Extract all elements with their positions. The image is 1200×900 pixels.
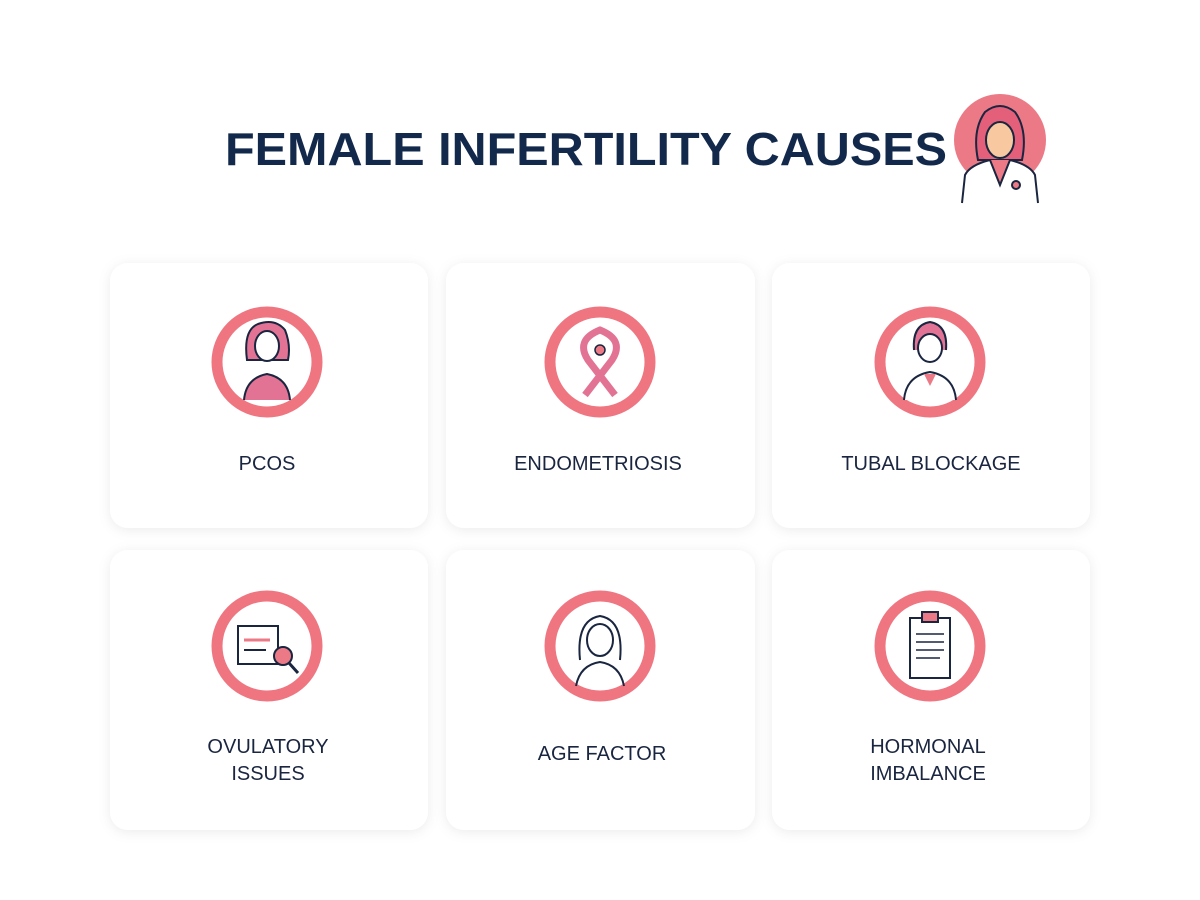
panel: PCOS	[110, 263, 428, 528]
label: PCOS	[239, 453, 295, 475]
panel: tubal blockage	[772, 263, 1090, 528]
panel: hormonal imbalance	[772, 550, 1090, 830]
panel: ovulatory issues	[110, 550, 428, 830]
icon: clipboard	[880, 596, 980, 696]
panel: endometriosis	[446, 263, 755, 528]
label: ENDOMETRIOSIS	[514, 453, 682, 475]
panel: age factor	[446, 550, 755, 830]
label: HORMONAL	[870, 736, 986, 758]
label: AGE FACTOR	[538, 743, 666, 765]
icon: doctor	[954, 94, 1046, 203]
panel: ovulatory issues: ISSUES	[231, 763, 305, 785]
icon: woman	[217, 312, 317, 412]
label: OVULATORY	[207, 736, 329, 758]
panel: hormonal imbalance: IMBALANCE	[870, 763, 986, 785]
icon: doctor	[880, 312, 980, 412]
icon: ribbon	[550, 312, 650, 412]
icon: chart and magnifier	[217, 596, 317, 696]
title: FEMALE INFERTILITY CAUSES	[225, 123, 947, 175]
icon: woman	[550, 596, 650, 696]
label: TUBAL BLOCKAGE	[841, 453, 1021, 475]
